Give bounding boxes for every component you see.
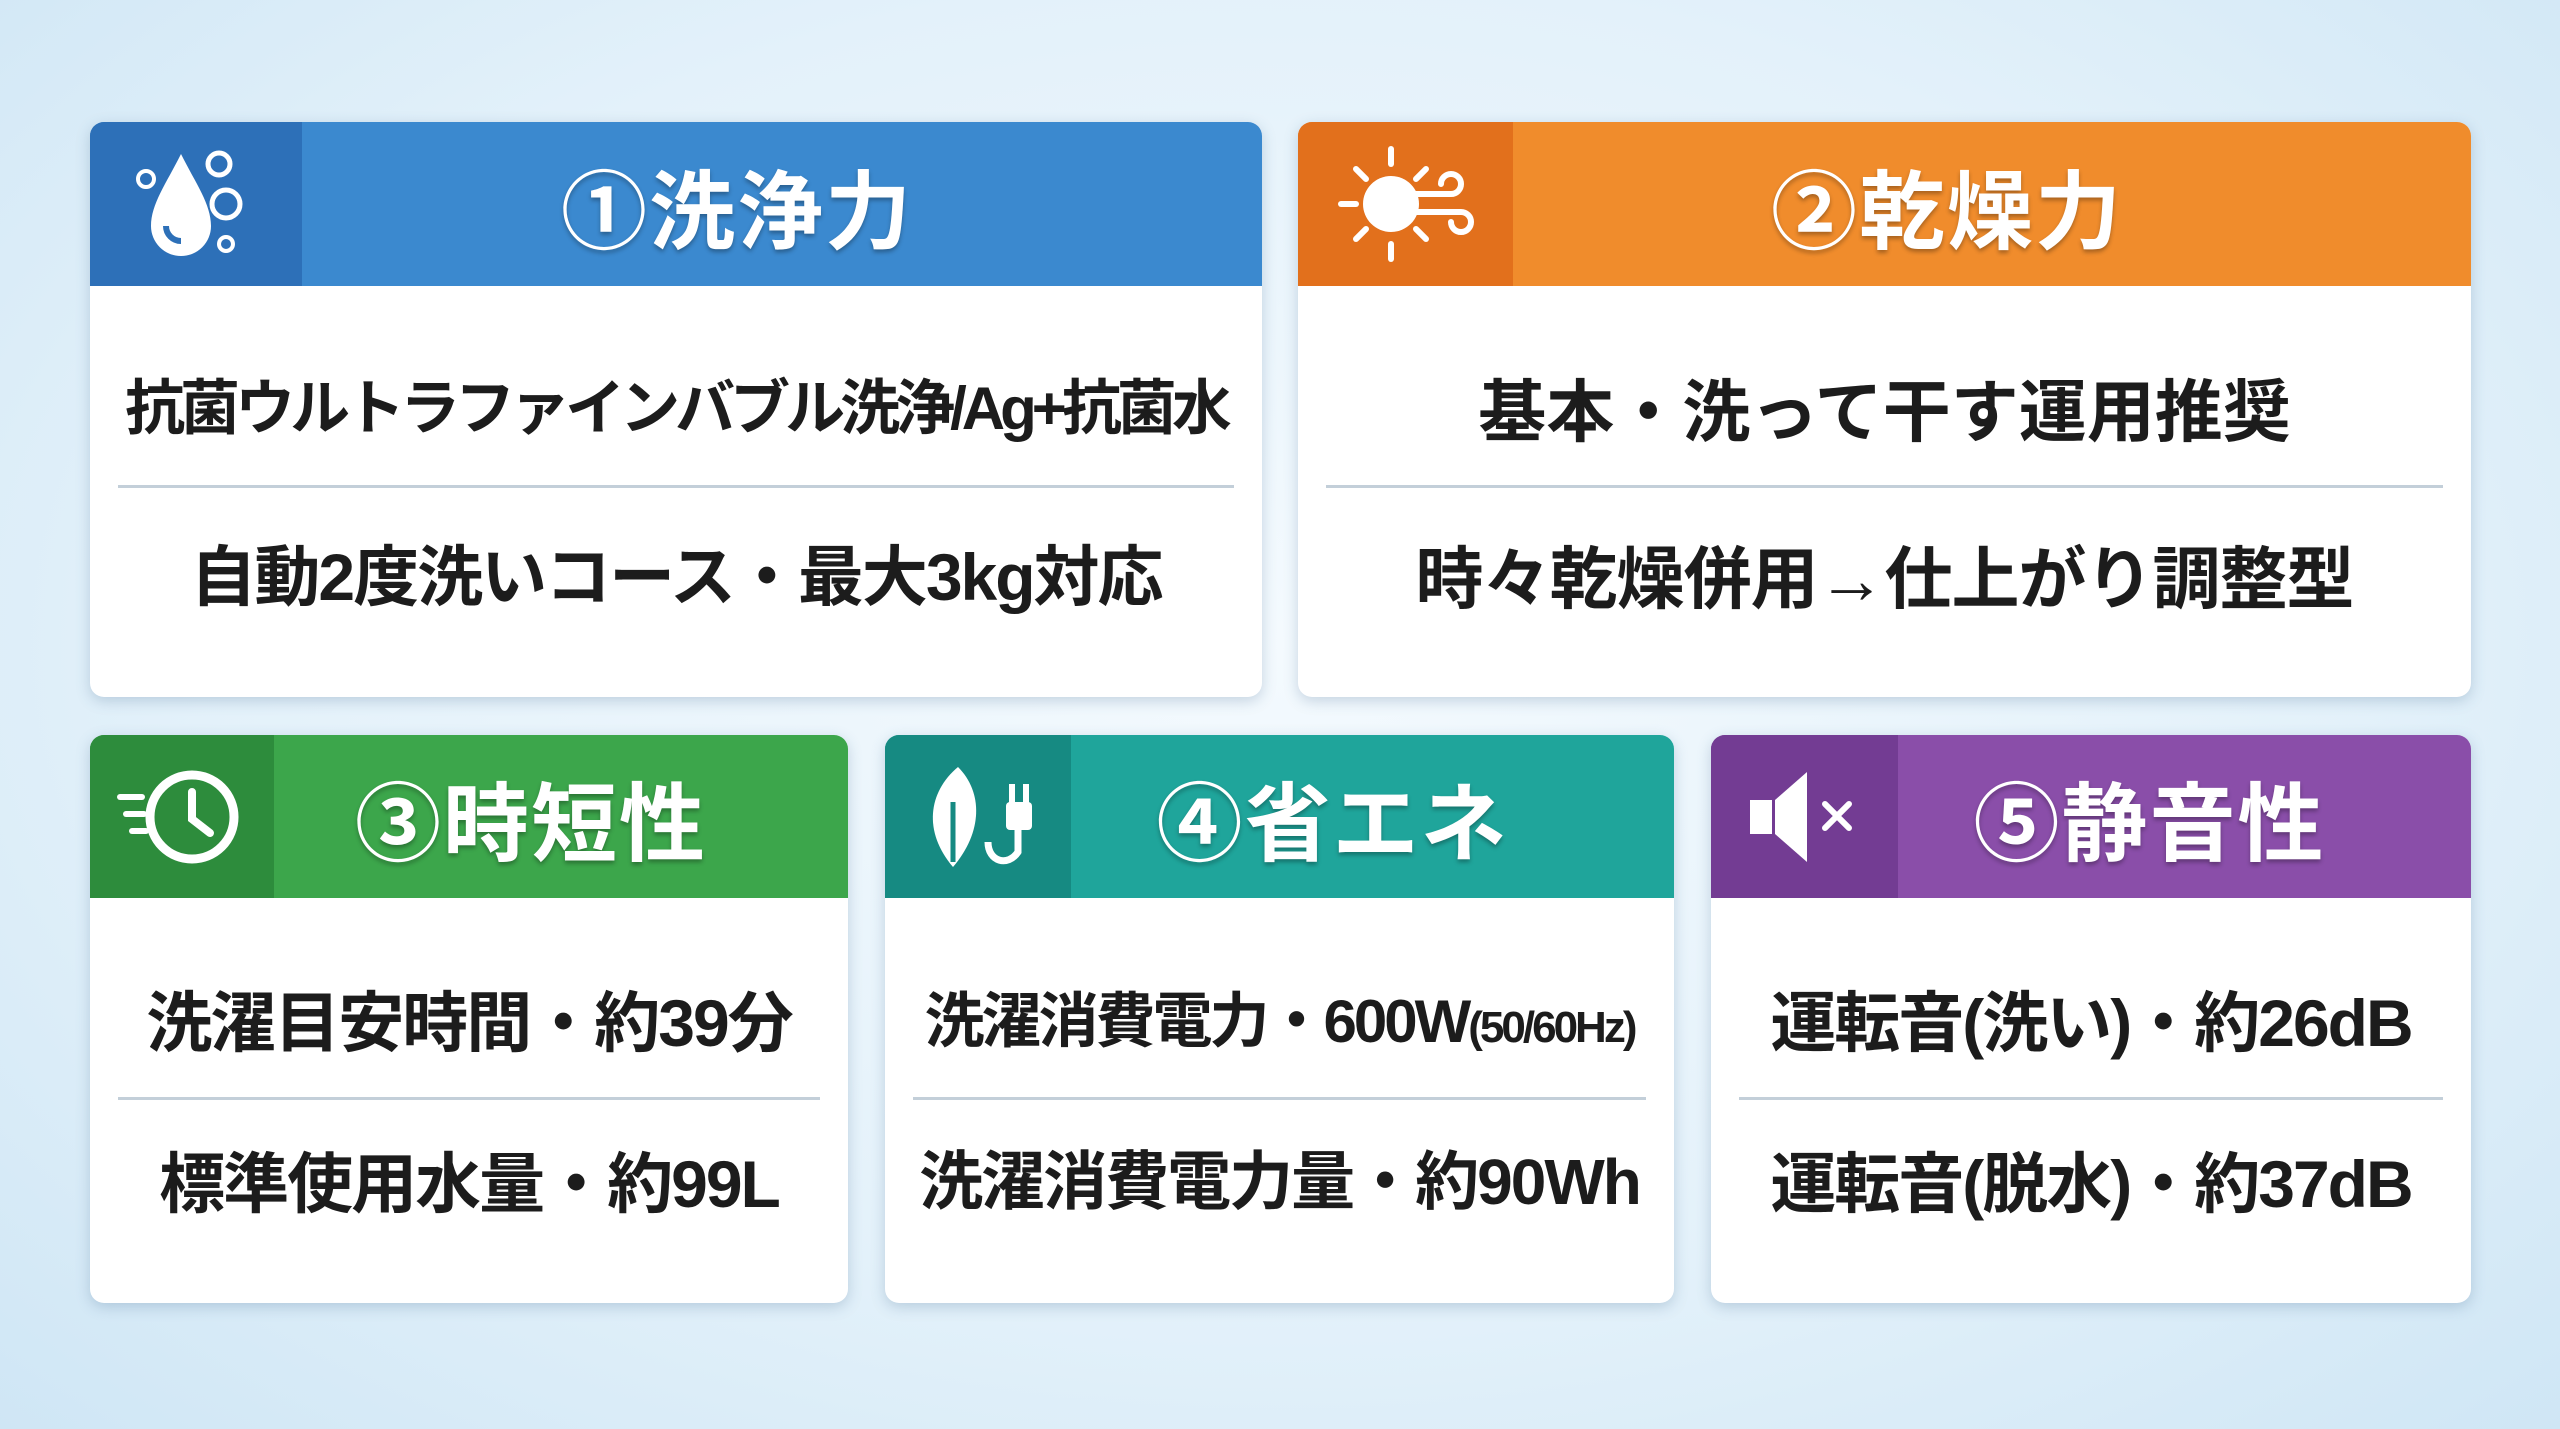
heading: ②乾燥力 <box>1771 164 2123 260</box>
text: line 2: 標準使用水量・約99L <box>159 1147 779 1221</box>
panel: 時短性 <box>90 735 848 1303</box>
heading: ④省エネ <box>1156 777 1508 873</box>
text: line 1: 運転音(洗い)・約26dB <box>1770 986 2412 1060</box>
text: line 2: 運転音(脱水)・約37dB <box>1770 1147 2412 1221</box>
text: line 1: 基本・洗って干す運用推奨 <box>1478 375 2291 451</box>
text: line 2: 時々乾燥併用→仕上がり調整型 <box>1415 542 2354 618</box>
header: 省エネ <box>885 735 1674 898</box>
text: line 2: 自動2度洗いコース・最大3kg対応 <box>190 540 1162 614</box>
header: 静音性 <box>1711 735 2471 898</box>
icon: clock with speed lines <box>90 735 274 898</box>
heading: ①洗浄力 <box>561 164 913 260</box>
icon: water drop with bubbles <box>90 122 302 286</box>
icon: muted speaker <box>1711 735 1898 898</box>
text: line 1: 抗菌ウルトラファインバブル洗浄/Ag+抗菌水 <box>125 375 1227 442</box>
panel: 洗浄力 <box>90 122 1262 697</box>
icon: sun with wind <box>1298 122 1513 286</box>
panel: 静音性 <box>1711 735 2471 1303</box>
panel: 省エネ <box>885 735 1674 1303</box>
panel: 乾燥力 <box>1298 122 2471 697</box>
heading: ③時短性 <box>355 777 707 873</box>
text: line 1: 洗濯消費電力・600W(50/60Hz) <box>925 988 1634 1055</box>
text: line 2: 洗濯消費電力量・約90Wh <box>919 1146 1640 1218</box>
text: line 1: 洗濯目安時間・約39分 <box>146 986 792 1060</box>
heading: ⑤静音性 <box>1974 777 2326 873</box>
header: 時短性 <box>90 735 848 898</box>
icon: leaf with plug <box>885 735 1071 898</box>
header: 乾燥力 <box>1298 122 2471 286</box>
header: 洗浄力 <box>90 122 1262 286</box>
